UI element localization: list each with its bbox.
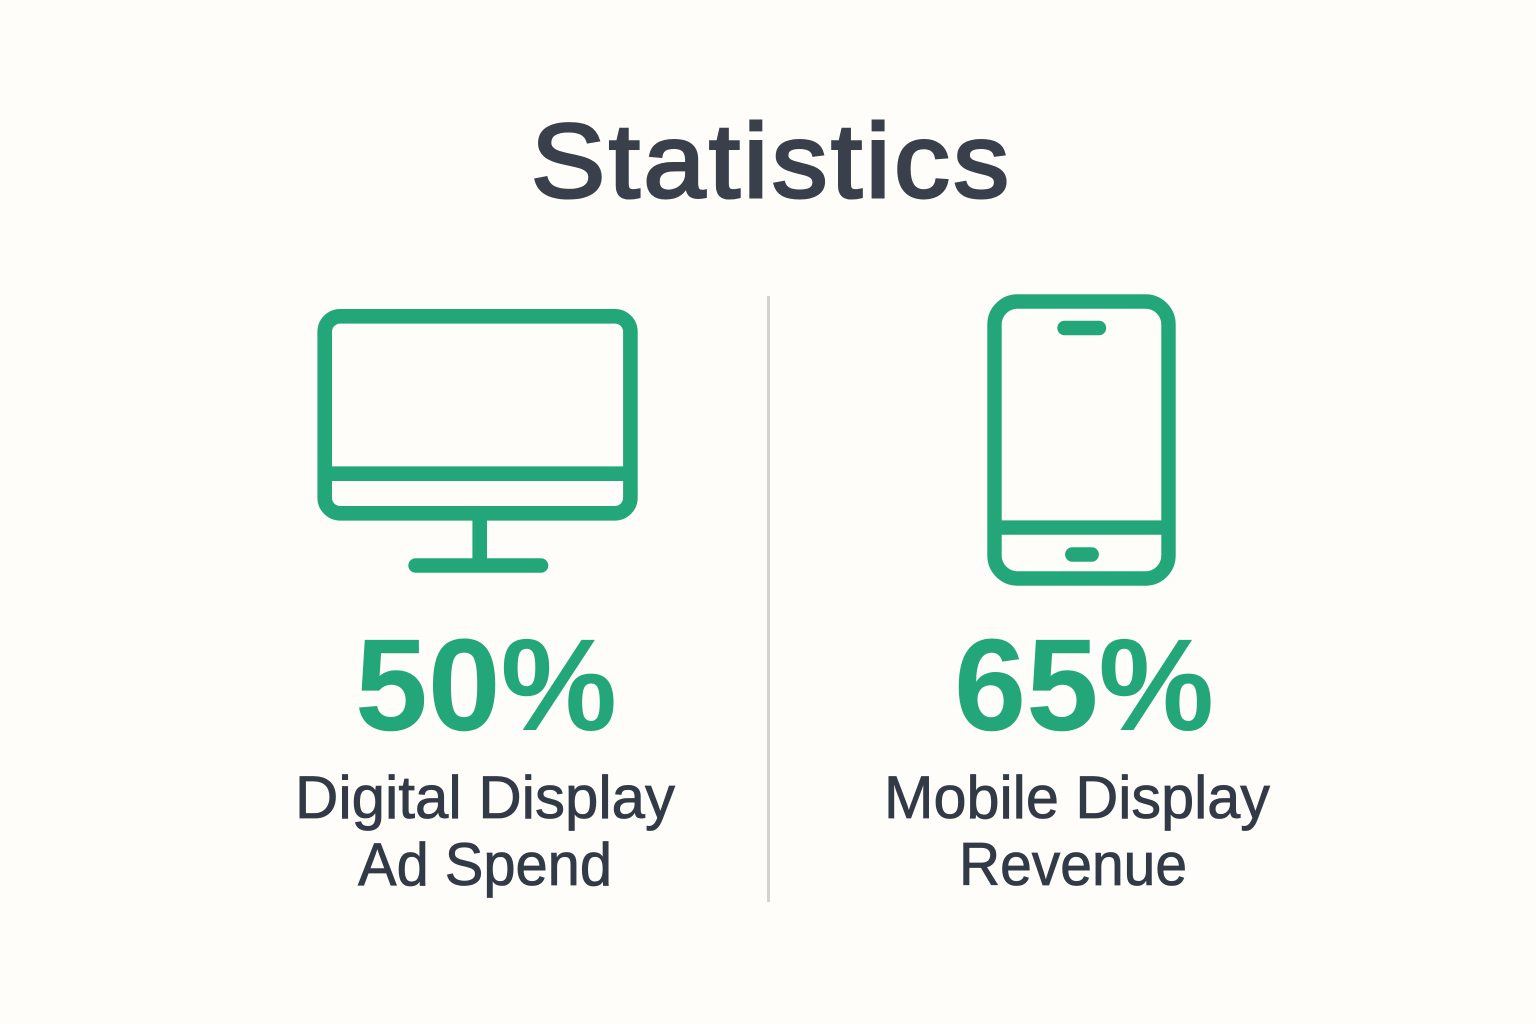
- label: Mobile Display Revenue: [884, 764, 1270, 898]
- icon: smartphone: [994, 302, 1168, 578]
- icon: desktop monitor: [325, 316, 630, 566]
- label: Digital Display Ad Spend: Ad Spend: [358, 831, 612, 898]
- label: Digital Display Ad Spend: Digital Display: [295, 764, 675, 831]
- stat value: 65%: 65%: [954, 611, 1214, 758]
- divider line: [767, 296, 770, 902]
- label: Digital Display Ad Spend: [295, 764, 675, 898]
- title: Statistics: [531, 102, 1009, 219]
- label: Mobile Display Revenue: Mobile Display: [884, 764, 1270, 831]
- stat value: 50%: 50%: [355, 611, 617, 758]
- label: Mobile Display Revenue: Revenue: [959, 831, 1187, 898]
